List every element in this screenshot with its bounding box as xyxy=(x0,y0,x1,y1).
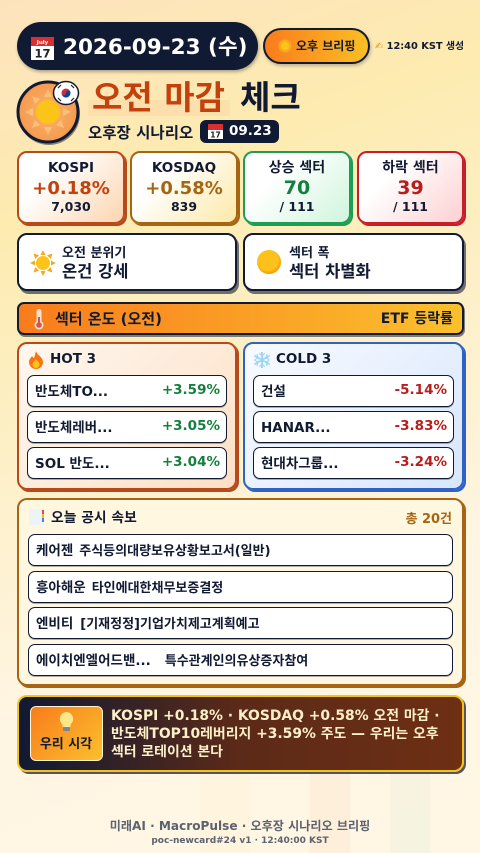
stat card: KOSDAQ xyxy=(130,151,238,224)
title xyxy=(88,78,301,117)
row: hot 3 xyxy=(27,447,227,479)
panel: our view xyxy=(17,695,464,772)
icon: snowflake xyxy=(254,352,270,368)
row: hot 1: +3.59% xyxy=(162,382,220,398)
mood value: 온건 강세 xyxy=(62,262,128,281)
row: cold 1: -5.14% xyxy=(395,382,447,398)
title dark: 체크 xyxy=(240,78,301,117)
icon: calendar: July xyxy=(36,40,49,46)
row: hot 2 xyxy=(27,411,227,443)
row: cold 1 xyxy=(253,375,454,407)
panel: disclosures xyxy=(17,498,464,686)
row: disclosure 2 xyxy=(28,571,453,603)
panel: cold sectors xyxy=(243,342,464,490)
date pill xyxy=(17,22,258,70)
disclosure count: 총 20건 xyxy=(405,512,452,527)
row: cold 3: -3.24% xyxy=(395,454,447,470)
row: hot 3: +3.04% xyxy=(162,454,220,470)
width value: 섹터 차별화 xyxy=(289,262,371,281)
background faint bars xyxy=(310,774,350,853)
icon: calendar xyxy=(31,37,54,60)
mood label: 오전 분위기 xyxy=(62,246,126,261)
mood card: morning mood xyxy=(17,233,237,291)
icon: sun small xyxy=(278,40,292,52)
footer line 2: poc-newcard#24 v1 · 12:40:00 KST xyxy=(151,836,329,846)
row: cold 2: -3.83% xyxy=(395,418,447,434)
stat card: falling sectors: 하락 섹터 xyxy=(382,160,439,176)
stat card: KOSDAQ: KOSDAQ xyxy=(152,160,216,176)
bar title: 섹터 온도 (오전) xyxy=(55,310,162,328)
icon: sun xyxy=(30,250,56,276)
width label: 섹터 폭 xyxy=(289,246,329,261)
icon: korean flag badge xyxy=(54,82,78,104)
row: cold 3: 현대차그룹... xyxy=(261,456,338,472)
generated time: ✍ 12:40 KST 생성 xyxy=(375,41,464,52)
row: disclosure 3 xyxy=(28,607,453,639)
icon: light bulb xyxy=(60,712,74,731)
icon: flame xyxy=(29,351,43,369)
row: hot 3: SOL 반도... xyxy=(35,456,110,472)
date text: 2026-09-23 (수) xyxy=(63,35,247,60)
stat card: falling sectors xyxy=(357,151,464,224)
bar right label: ETF 등락률 xyxy=(381,311,453,327)
chip text: 09.23 xyxy=(229,123,272,139)
cold heading: COLD 3 xyxy=(276,351,331,367)
row: hot 2: 반도체레버... xyxy=(35,420,112,436)
icon: calendar small xyxy=(208,124,223,139)
view text: 반도체TOP10레버리지 +3.59% 주도 — 우리는 오후 xyxy=(111,726,439,742)
icon: sun avatar with flag xyxy=(16,80,80,145)
row: disclosure 4 xyxy=(28,644,453,676)
hot heading: HOT 3 xyxy=(50,351,96,367)
icon: yellow circle xyxy=(257,250,281,274)
stat card: KOSPI: 7,030 xyxy=(51,199,91,214)
stat card: KOSDAQ: +0.58% xyxy=(145,178,223,199)
stat card: KOSPI xyxy=(17,151,125,224)
stat card: rising sectors: 70 xyxy=(284,177,310,199)
badge label: 우리 시각 xyxy=(40,737,92,752)
stat card: KOSPI: KOSPI xyxy=(48,160,94,176)
stat card: KOSPI: +0.18% xyxy=(32,178,110,199)
row: disclosure 1: 케어젠 주식등의대량보유상황보고서(일반) xyxy=(36,543,271,559)
section bar xyxy=(17,302,464,335)
row: hot 2: +3.05% xyxy=(162,418,220,434)
icon: thermometer xyxy=(34,309,44,330)
subtitle: 오후장 시나리오 xyxy=(88,124,193,142)
row: disclosure 3: 엔비티 [기재정정]기업가치제고계획예고 xyxy=(36,616,260,632)
briefing label: 오후 브리핑 xyxy=(296,39,355,53)
stat card: KOSDAQ: 839 xyxy=(171,199,197,214)
row: cold 2 xyxy=(253,411,454,443)
row: disclosure 4: 에이치엔엘어드밴... 특수관계인의유상증자참여 xyxy=(36,653,308,669)
row: disclosure 1 xyxy=(28,534,453,566)
stat card: falling sectors: / 111 xyxy=(393,199,428,214)
disclosure heading: 오늘 공시 속보 xyxy=(51,510,137,526)
icon: document xyxy=(29,509,44,525)
badge: our view xyxy=(30,706,103,761)
footer line 1: 미래AI · MacroPulse · 오후장 시나리오 브리핑 xyxy=(110,819,370,833)
row: cold 3 xyxy=(253,447,454,479)
briefing pill xyxy=(263,28,370,64)
view text: 섹터 로테이션 본다 xyxy=(111,744,223,760)
stat card: rising sectors: 상승 섹터 xyxy=(269,160,325,176)
mood card: sector width xyxy=(243,233,464,291)
date chip xyxy=(200,120,279,143)
row: hot 1: 반도체TO... xyxy=(35,384,108,400)
panel: hot sectors xyxy=(17,342,237,490)
stat card: falling sectors: 39 xyxy=(397,177,424,199)
title orange: 오전 마감 xyxy=(92,78,225,117)
view text xyxy=(111,708,440,760)
title highlight xyxy=(88,100,230,116)
row: cold 2: HANAR... xyxy=(261,420,331,436)
row: disclosure 2: 흥아해운 타인에대한채무보증결정 xyxy=(36,580,223,596)
row: cold 1: 건설 xyxy=(261,384,286,400)
row: hot 1 xyxy=(27,375,227,407)
stat card: rising sectors xyxy=(243,151,351,224)
stat card: rising sectors: / 111 xyxy=(279,199,314,214)
view text: KOSPI +0.18% · KOSDAQ +0.58% 오전 마감 · xyxy=(111,708,440,724)
